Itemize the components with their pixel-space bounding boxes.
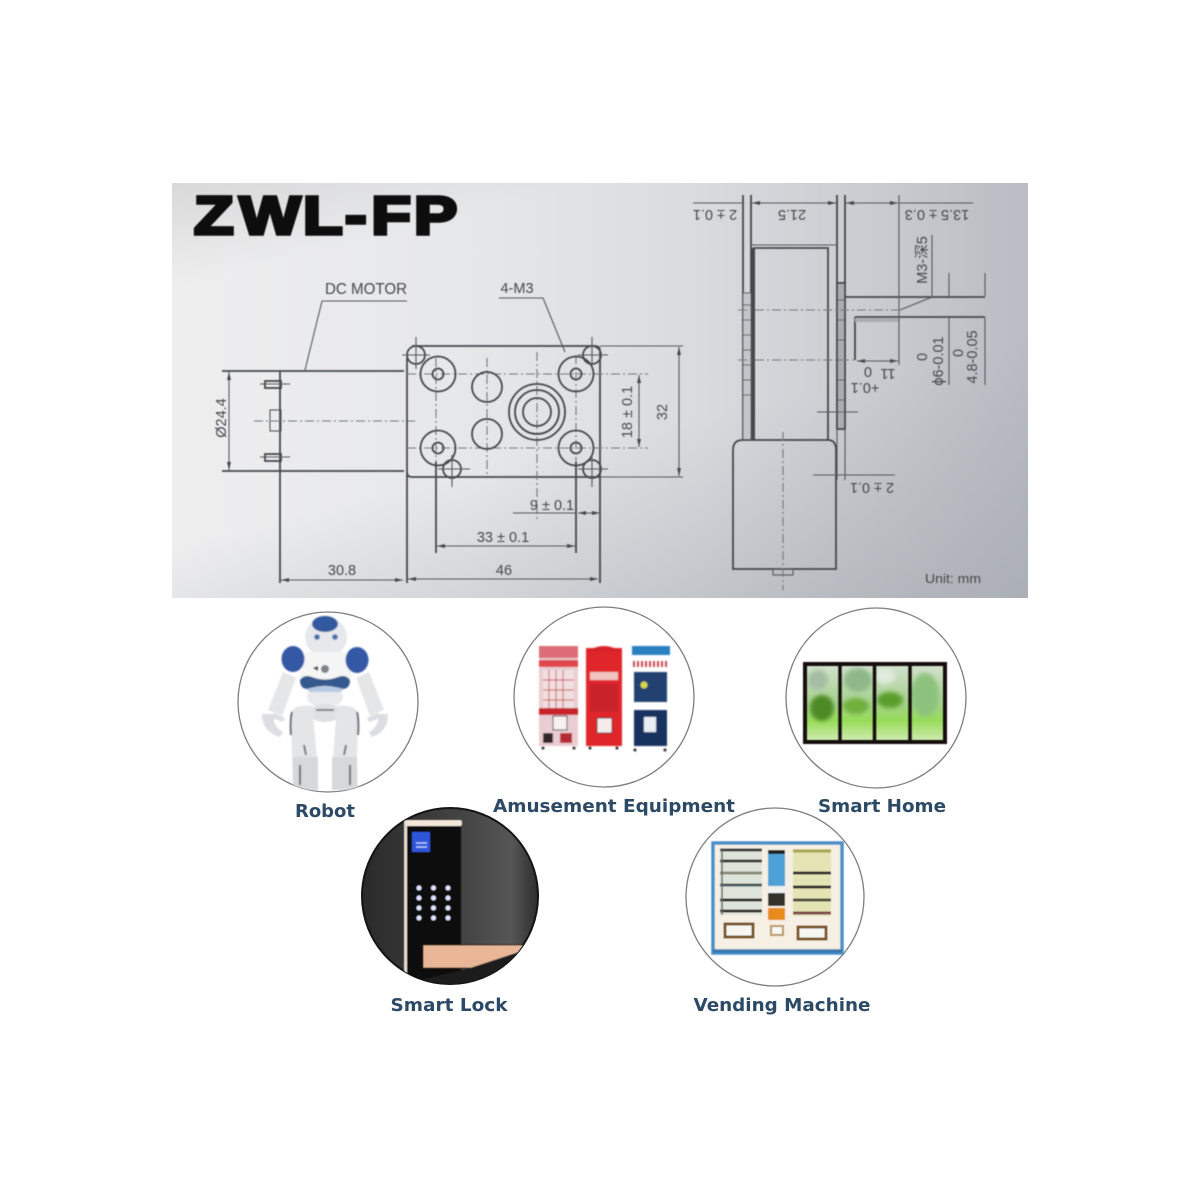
cabinet 3 (632, 646, 670, 752)
side view dimensions: 2 ± 0.1 (850, 479, 894, 495)
DC motor body (222, 371, 415, 583)
unit note: Unit: mm (925, 571, 981, 586)
side view dimensions: 0 (951, 349, 967, 357)
claw machines (539, 646, 670, 752)
front view dimensions: 9 ± 0.1 (530, 498, 574, 514)
window illustration (805, 664, 945, 742)
smart lock label: Smart Lock (390, 995, 509, 1016)
DC motor callout (305, 281, 407, 370)
application: smart home (786, 608, 966, 817)
side view dimensions: ϕ6-0.01 (931, 336, 947, 386)
side view dimensions: 0 (864, 363, 872, 379)
application: robot (238, 612, 418, 822)
left shelves (720, 848, 762, 915)
side view dimensions: 0 (915, 353, 931, 361)
amusement equipment label: Amusement Equipment (493, 796, 735, 817)
bottom panels (725, 924, 826, 939)
mounting holes (420, 356, 594, 466)
side view dimensions: 13.5 ± 0.3 (905, 206, 969, 222)
front view drawing (214, 281, 683, 583)
DC motor callout: DC MOTOR (325, 281, 407, 298)
front view dimensions: 33 ± 0.1 (477, 530, 529, 546)
vending machine label: Vending Machine (694, 995, 870, 1016)
side view dimensions: 4.8-0.05 (965, 330, 981, 384)
side view drawing (693, 195, 985, 590)
side view dimensions: 2 ± 0.1 (693, 206, 737, 222)
output shaft circles (509, 384, 565, 440)
front view dimensions: 32 (655, 404, 671, 420)
side view dimensions: 21.5 (778, 206, 806, 222)
front view dimensions: 30.8 (328, 563, 356, 579)
front view dimensions: 18 ± 0.1 (620, 386, 636, 438)
front view dimensions: 46 (496, 563, 512, 579)
side view dimensions: +0.1 (851, 379, 879, 395)
side view dimensions (693, 203, 985, 495)
side view dimensions: 11 (880, 365, 896, 381)
center column (768, 850, 785, 920)
side view dimensions: M3-深5 (914, 236, 931, 284)
mounting plate (407, 346, 683, 583)
shaft (738, 195, 985, 365)
panel: dimension drawing (172, 183, 1028, 598)
application: amusement equipment (493, 607, 735, 817)
motor end view (733, 432, 836, 590)
application: vending machine (686, 808, 870, 1016)
cabinet 2 (586, 646, 622, 750)
vending machine illustration (713, 843, 842, 953)
robot label: Robot (295, 801, 355, 822)
small screws (402, 337, 608, 487)
front view dimensions (214, 347, 679, 580)
lock illustration (400, 820, 525, 990)
front view dimensions: Ø24.4 (214, 398, 230, 438)
smart home label: Smart Home (818, 796, 946, 817)
4-M3 callout: 4-M3 (500, 281, 534, 297)
title: ZWL-FP (194, 185, 457, 246)
application: smart lock (362, 808, 538, 1016)
side view gearbox (743, 195, 858, 480)
robot illustration (262, 616, 388, 790)
4-M3 callout (499, 281, 565, 352)
cabinet 1 (539, 646, 578, 750)
right shelves (793, 849, 831, 916)
